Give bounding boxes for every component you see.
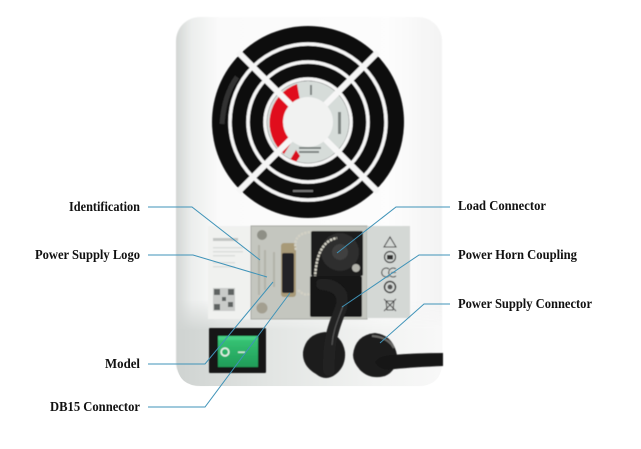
load connector (311, 231, 363, 292)
target symbol (384, 282, 396, 292)
label: Model: Model (105, 357, 140, 372)
power cable and right plug (353, 333, 443, 377)
label: Power Horn Coupling: Power Horn Coupling (458, 248, 577, 263)
metal plate (251, 226, 367, 319)
label: DB15 Connector: DB15 Connector (50, 400, 140, 415)
fan grille (212, 26, 404, 218)
horn coupling socket (310, 276, 362, 317)
fan dark reflections (222, 77, 313, 192)
DB15 connector (281, 243, 296, 297)
fan hub (283, 97, 333, 147)
infographic: power supply rear panel (35, 17, 592, 411)
label: Identification: Identification (69, 200, 140, 215)
device body (176, 17, 442, 386)
switch dash mark (238, 352, 245, 353)
rocker switch (209, 328, 266, 373)
label: Load Connector: Load Connector (458, 199, 546, 214)
leader line: Load Connector (337, 207, 450, 253)
chain (295, 232, 327, 295)
rear panel (208, 226, 410, 319)
horn cable and left plug (303, 284, 345, 378)
switch circle mark (221, 348, 229, 356)
fan black disc (212, 26, 404, 218)
recycling bin symbol (384, 299, 396, 311)
fan white rings (230, 44, 386, 200)
QR code (213, 288, 235, 311)
label: Power Supply Logo: Power Supply Logo (35, 248, 140, 263)
leader line: Identification (148, 207, 260, 260)
warning symbol (384, 237, 396, 247)
leader line: Power Supply Connector (380, 304, 450, 343)
label: Power Supply Connector: Power Supply Connector (458, 297, 592, 312)
identification label (208, 226, 252, 319)
CE mark (382, 268, 396, 277)
manual symbol (384, 252, 396, 262)
leader line: Power Supply Logo (148, 255, 267, 277)
fan cross bars (238, 52, 378, 192)
fan gauge label (267, 81, 349, 163)
leader line: Model (148, 282, 273, 364)
leader line: Power Horn Coupling (342, 255, 450, 307)
symbols panel (367, 226, 410, 318)
leader line: DB15 Connector (148, 293, 290, 407)
